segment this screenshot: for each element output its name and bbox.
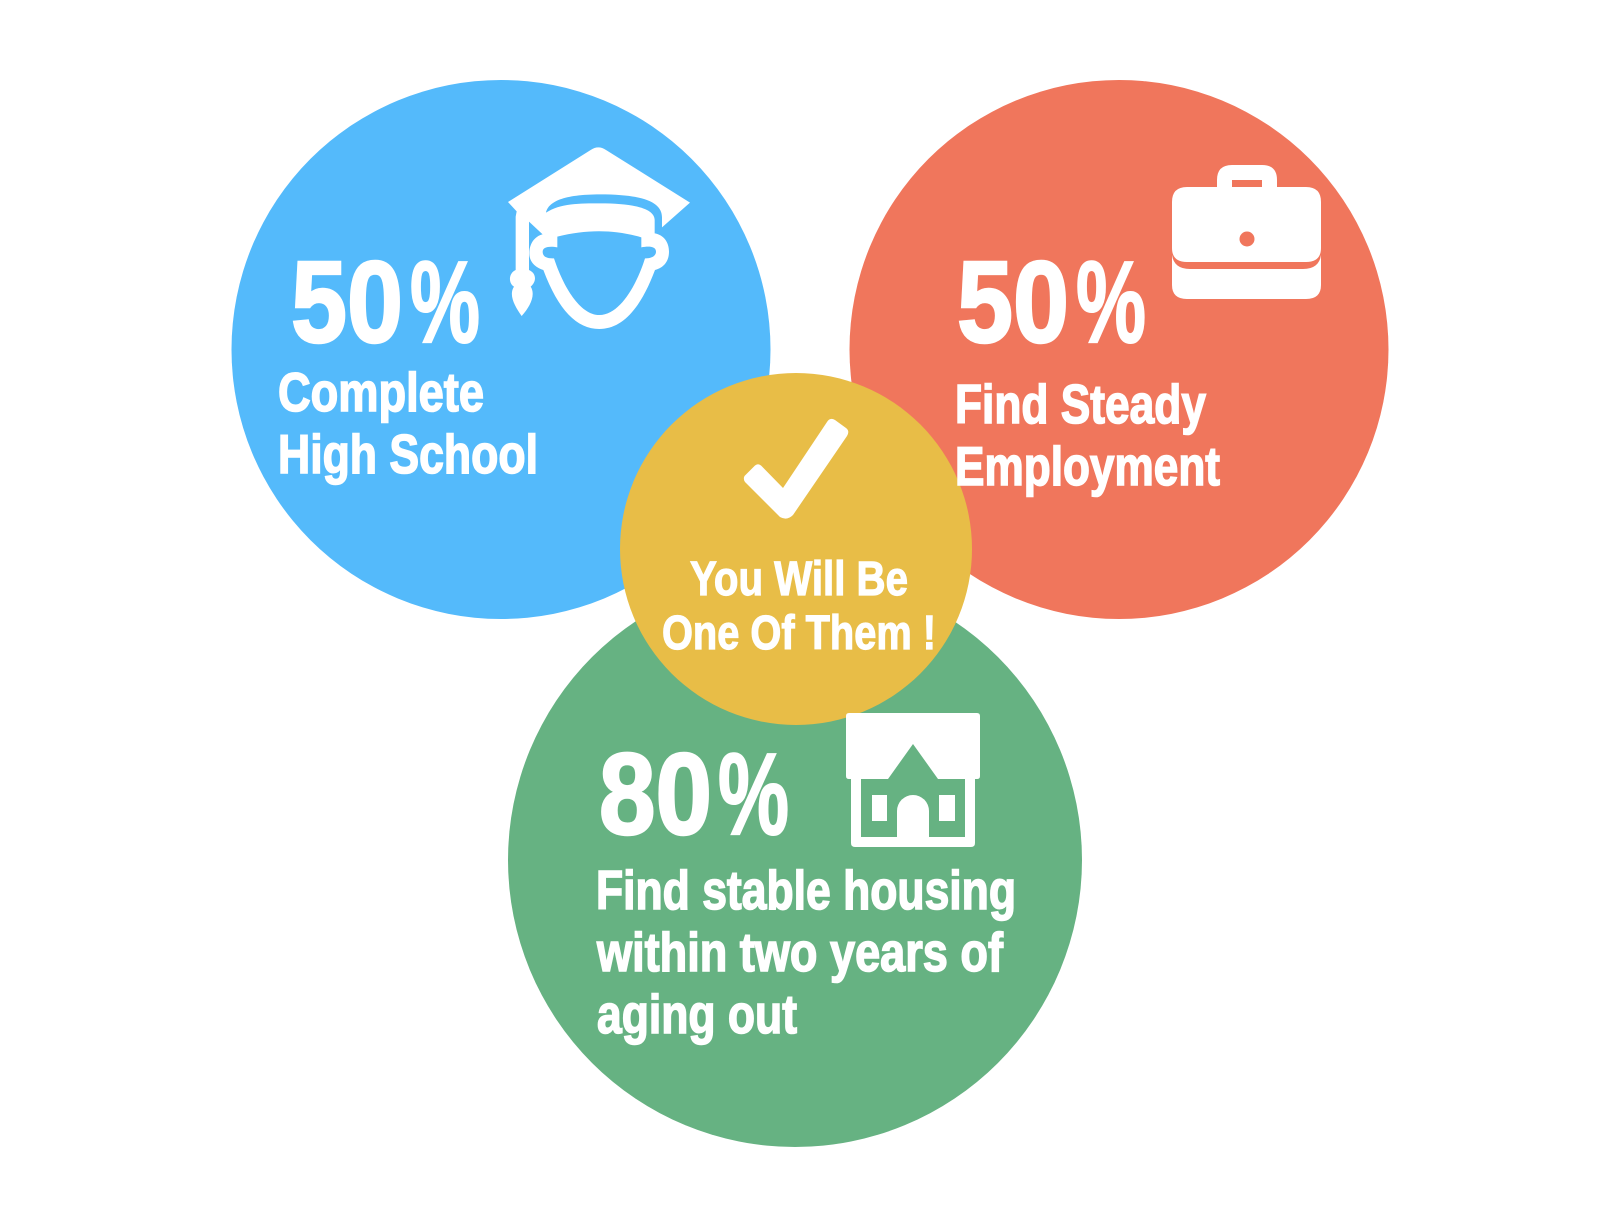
stat: 50 percent employment	[957, 237, 1146, 367]
text: you will be one of them: One Of Them !	[662, 607, 936, 660]
icon: check mark	[744, 419, 848, 519]
label: find steady employment: Find Steady	[955, 373, 1206, 435]
stat: 50 percent employment: %	[1076, 237, 1146, 367]
panel: employment	[955, 165, 1321, 497]
label: find steady employment: Employment	[955, 435, 1220, 497]
label: find stable housing: aging out	[597, 983, 797, 1045]
stat: 80 percent housing: %	[718, 729, 789, 859]
label: complete high school: Complete	[278, 361, 484, 423]
label: find stable housing	[596, 859, 1016, 1045]
panel: high school	[278, 147, 690, 485]
stat: 50 percent employment: 50	[957, 237, 1069, 367]
icon: graduate with cap	[508, 147, 690, 329]
stat: 80 percent housing: 80	[599, 729, 712, 859]
label: find stable housing: within two years of	[596, 921, 1004, 983]
stat: 80 percent housing	[599, 729, 789, 859]
text: you will be one of them: You Will Be	[690, 553, 908, 606]
circle: yellow center	[620, 373, 972, 725]
label: complete high school: High School	[278, 423, 538, 485]
circle: red employment	[850, 80, 1388, 619]
label: find steady employment	[955, 373, 1220, 497]
label: find stable housing: Find stable housing	[596, 859, 1016, 921]
text: you will be one of them	[662, 553, 936, 660]
circle: green housing	[508, 573, 1082, 1147]
stat: 50 percent high school: 50	[291, 237, 403, 367]
icon: house	[846, 713, 980, 847]
stat: 50 percent high school	[291, 237, 480, 367]
icon: briefcase	[1172, 165, 1321, 299]
label: complete high school	[278, 361, 538, 485]
panel: center message	[662, 419, 936, 660]
panel: housing	[596, 713, 1016, 1045]
stat: 50 percent high school: %	[410, 237, 480, 367]
circle: blue education	[232, 80, 770, 619]
